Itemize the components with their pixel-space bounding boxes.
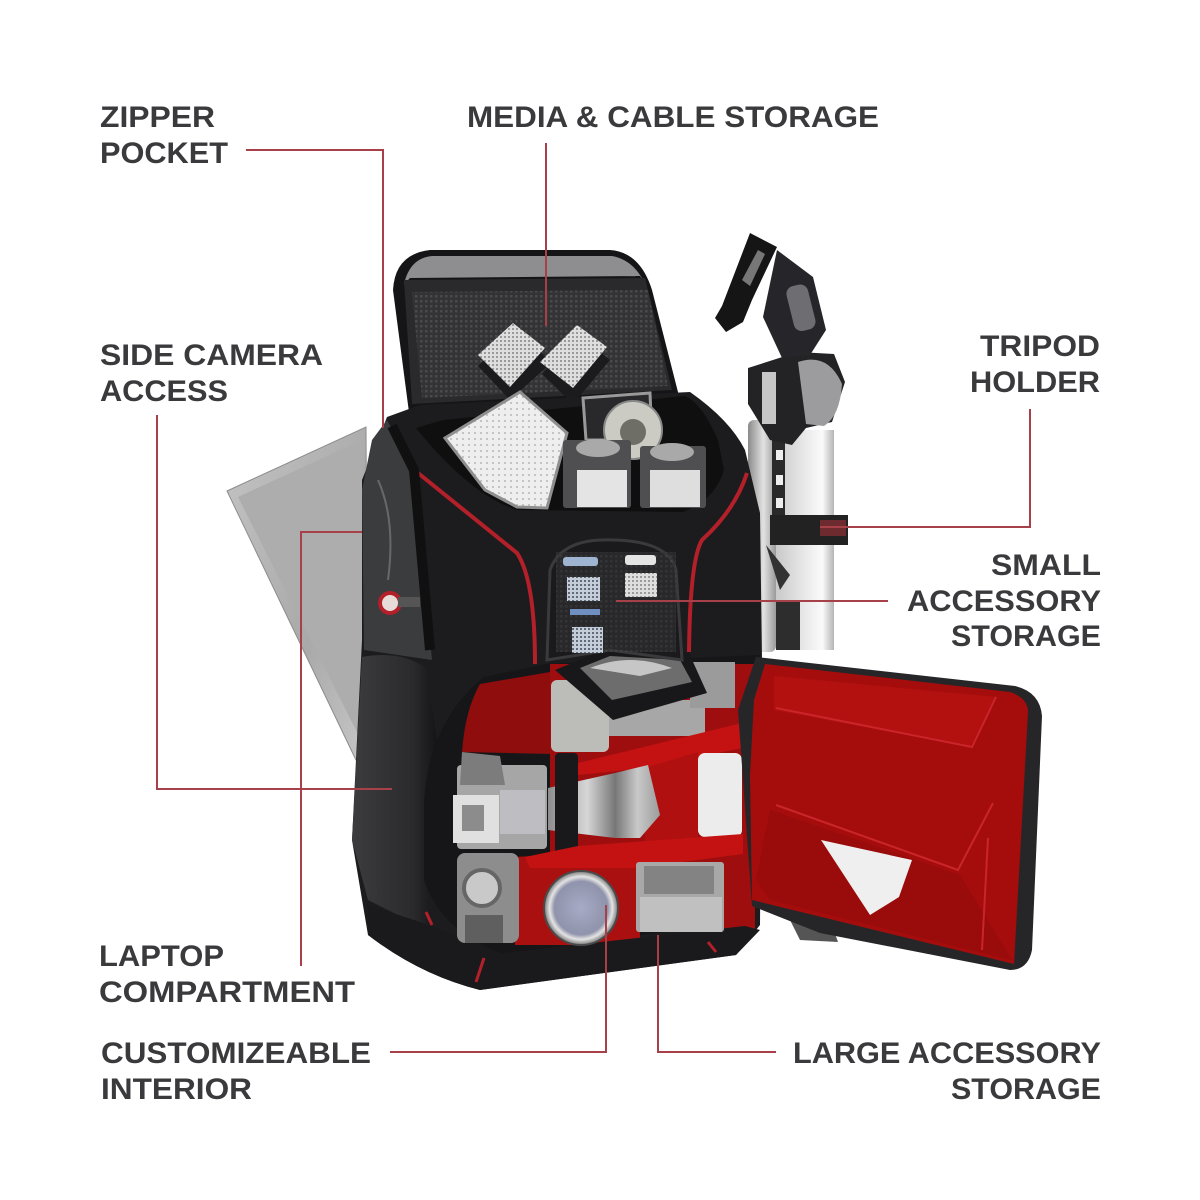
laptop [227, 427, 368, 770]
small accessory organiser [547, 540, 682, 660]
upper compartment with gear [416, 392, 724, 512]
callout: large accessory storage: STORAGE [951, 1073, 1101, 1106]
callout: small accessory storage: SMALL [991, 549, 1101, 582]
callout: small accessory storage: STORAGE [951, 620, 1101, 653]
battery panels in lid [478, 323, 610, 404]
callout: side camera access: ACCESS [100, 375, 228, 408]
callout: customizeable interior [101, 905, 606, 1106]
bottom band [368, 905, 760, 990]
callout: large accessory storage [658, 935, 1101, 1106]
main camera [453, 752, 660, 849]
callout: laptop compartment: COMPARTMENT [99, 976, 355, 1009]
callout: small accessory storage [616, 549, 1101, 653]
callout: zipper pocket [100, 101, 383, 428]
callout: zipper pocket: POCKET [100, 137, 228, 170]
callout: media and cable storage: MEDIA & CABLE STORAGE [467, 101, 879, 134]
tripod plate [715, 233, 777, 332]
vertical divider [645, 752, 698, 846]
main backpack body [352, 392, 762, 990]
tripod head ball [748, 352, 845, 445]
lower left camera [457, 853, 519, 943]
tripod neck [763, 250, 826, 358]
illustration: camera backpack [227, 233, 1042, 990]
lower shelf [525, 834, 743, 868]
callout: side camera access [100, 339, 392, 789]
upper camera [551, 650, 735, 752]
callout: laptop compartment [99, 532, 362, 1009]
open top lid [393, 250, 680, 420]
tripod strap [770, 515, 848, 545]
callout: tripod holder [820, 330, 1100, 527]
side pocket with zipper [352, 420, 440, 930]
callout: side camera access: SIDE CAMERA [100, 339, 323, 372]
callout: laptop compartment: LAPTOP [99, 940, 224, 973]
callout: tripod holder: HOLDER [970, 366, 1100, 399]
tripod [715, 233, 848, 942]
lens [544, 871, 618, 945]
white accessory [698, 753, 742, 837]
lower red interior with cameras [368, 650, 760, 990]
callout: tripod holder: TRIPOD [980, 330, 1100, 363]
open front flap [738, 657, 1042, 970]
right storage gear [636, 862, 724, 932]
red piping [418, 473, 535, 664]
upper shelf [578, 722, 752, 775]
callout: customizeable interior: INTERIOR [101, 1073, 252, 1106]
callout: large accessory storage: LARGE ACCESSORY [793, 1037, 1101, 1070]
callout: small accessory storage: ACCESSORY [907, 585, 1101, 618]
camera strap [555, 753, 578, 859]
callout: zipper pocket: ZIPPER [100, 101, 215, 134]
callout: customizeable interior: CUSTOMIZEABLE [101, 1037, 371, 1070]
tripod legs [748, 420, 776, 652]
